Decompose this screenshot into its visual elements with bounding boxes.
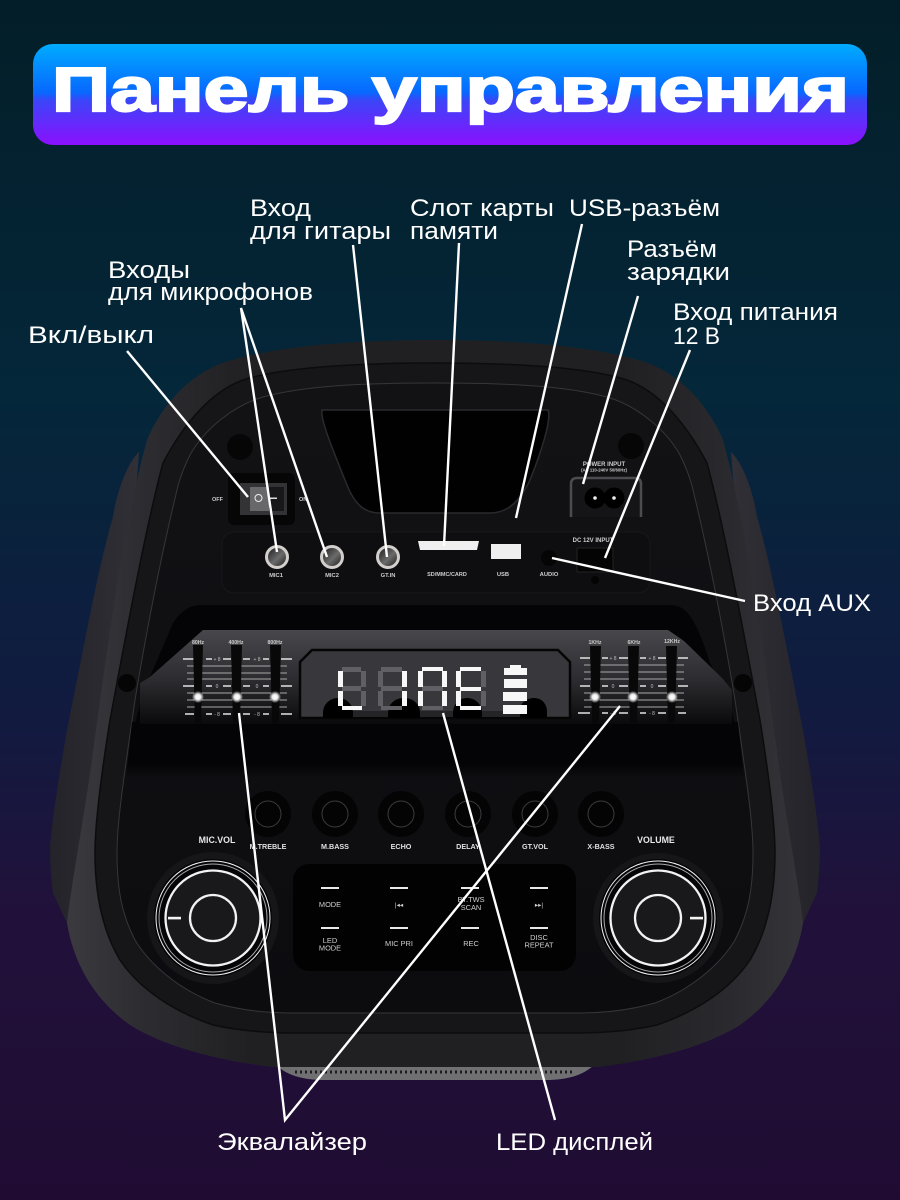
memory card slot [418, 541, 479, 578]
left equalizer: + 8 [213, 657, 221, 663]
label: equalizer: Эквалайзер [217, 1129, 367, 1156]
aux port [540, 550, 559, 578]
seven segment digits [342, 667, 486, 710]
shell outer ring [95, 363, 775, 1033]
label: usb: USB-разъём [569, 195, 720, 222]
right equalizer: - 8 [610, 711, 616, 717]
button panel: ▸▸| [535, 902, 543, 909]
speaker [50, 340, 820, 1080]
left side wing [50, 452, 139, 923]
button panel: MIC PRI [385, 939, 413, 948]
button panel: LED [323, 936, 337, 945]
label: charging port: Разъём [627, 236, 717, 263]
button panel [293, 864, 576, 971]
left equalizer: 400Hz [228, 640, 244, 646]
connector panel [222, 532, 650, 593]
small knobs row: M.BASS [321, 842, 349, 851]
small knobs row: X-BASS [587, 842, 615, 851]
button panel: SCAN [461, 903, 481, 912]
label: memory card [410, 195, 554, 245]
volume knob [593, 835, 723, 983]
right equalizer: 0 [612, 684, 615, 690]
title banner [33, 44, 867, 145]
right equalizer: - 8 [649, 711, 655, 717]
volume knob: VOLUME [637, 835, 675, 845]
inner panel [117, 383, 753, 1013]
label: dc input: Вход питания [673, 299, 838, 326]
mic volume knob [147, 835, 279, 984]
label: microphone inputs: для микрофонов [108, 279, 313, 306]
right equalizer: + 8 [609, 656, 617, 662]
arrow: aux [552, 558, 745, 601]
right equalizer: 1KHz [589, 640, 602, 646]
label: guitar input: для гитары [250, 218, 391, 245]
arrow: dc input [605, 350, 690, 558]
label: microphone inputs [108, 257, 313, 306]
button panel: |◂◂ [395, 902, 404, 909]
arrow: usb [516, 224, 582, 518]
side screws [118, 674, 752, 692]
power switch [212, 473, 307, 525]
small knobs row: GT.VOL [522, 842, 549, 851]
right equalizer [578, 639, 688, 723]
mic 2 jack: MIC2 [325, 573, 339, 579]
mic 2 jack [322, 546, 342, 579]
small knobs row: DELAY [456, 842, 480, 851]
dc input: DC 12V INPUT [573, 538, 614, 544]
button panel: REC [463, 939, 479, 948]
left equalizer: + 8 [253, 657, 261, 663]
guitar jack [378, 546, 398, 579]
battery indicator [503, 665, 527, 714]
usb port [491, 544, 521, 578]
arrow: power switch [127, 351, 248, 497]
label: microphone inputs: Входы [108, 257, 190, 284]
small knobs row: M.TREBLE [250, 842, 287, 851]
control well [135, 605, 735, 724]
arrow: equalizer [239, 706, 620, 1120]
label: power switch: Вкл/выкл [28, 322, 154, 349]
dc input [573, 538, 614, 584]
left equalizer: - 8 [254, 712, 260, 718]
label: charging port [627, 236, 730, 286]
button panel: DISC [530, 933, 548, 942]
label: memory card: памяти [410, 218, 498, 245]
screw holes [227, 433, 644, 460]
label: dc input [673, 299, 838, 350]
power input socket: POWER INPUT [583, 462, 625, 468]
labels [28, 195, 871, 1156]
led display [300, 650, 570, 718]
label: guitar input [250, 195, 391, 245]
usb port: USB [497, 572, 509, 578]
arrow: led display [443, 713, 555, 1120]
bottom grille [273, 1062, 597, 1080]
label: charging port: зарядки [627, 259, 730, 286]
label: led display: LED дисплей [496, 1129, 653, 1156]
speaker main shell [67, 340, 803, 1067]
arrow lines [127, 224, 745, 1120]
handle recess [322, 410, 549, 513]
guitar jack: GT.IN [381, 573, 395, 579]
right side wing [731, 452, 820, 923]
title: Панель управления [52, 56, 849, 125]
left equalizer [183, 640, 292, 723]
arrow: guitar input [353, 245, 387, 557]
mic volume knob: MIC.VOL [199, 835, 236, 845]
mic 1 jack: MIC1 [269, 573, 284, 579]
right equalizer: 6KHz [628, 640, 641, 646]
power input socket [571, 462, 641, 517]
left equalizer: 0 [256, 684, 259, 690]
right equalizer: 12KHz [664, 639, 680, 645]
arrow: microphone inputs [241, 308, 327, 557]
right equalizer: + 8 [648, 656, 656, 662]
label: memory card: Слот карты [410, 195, 554, 222]
power input socket: (AC 110-240V 50/60Hz) [581, 468, 627, 472]
button panel: MODE [319, 900, 341, 909]
left equalizer: 0 [216, 684, 219, 690]
label: dc input: 12 В [673, 323, 720, 350]
memory card slot: SD/MMC/CARD [427, 572, 467, 578]
left equalizer: - 8 [214, 712, 220, 718]
small knobs row: ECHO [391, 842, 412, 851]
aux port: AUDIO [540, 572, 559, 578]
arrow: charging port [583, 296, 638, 484]
label: guitar input: Вход [250, 195, 311, 222]
power switch: ON [299, 497, 307, 503]
button panel: MODE [319, 944, 341, 952]
label: aux: Вход AUX [753, 590, 871, 617]
mic 1 jack [266, 546, 288, 579]
right equalizer: 0 [651, 684, 654, 690]
power switch: OFF [212, 497, 224, 503]
left equalizer: 800Hz [268, 640, 283, 646]
display bar [140, 630, 732, 724]
small knobs row [245, 791, 624, 851]
well lower fade [126, 722, 744, 778]
button panel: BT.TWS [457, 895, 485, 904]
button panel: REPEAT [524, 940, 554, 950]
arrow: memory card [444, 243, 459, 546]
left equalizer: 80Hz [192, 640, 204, 646]
